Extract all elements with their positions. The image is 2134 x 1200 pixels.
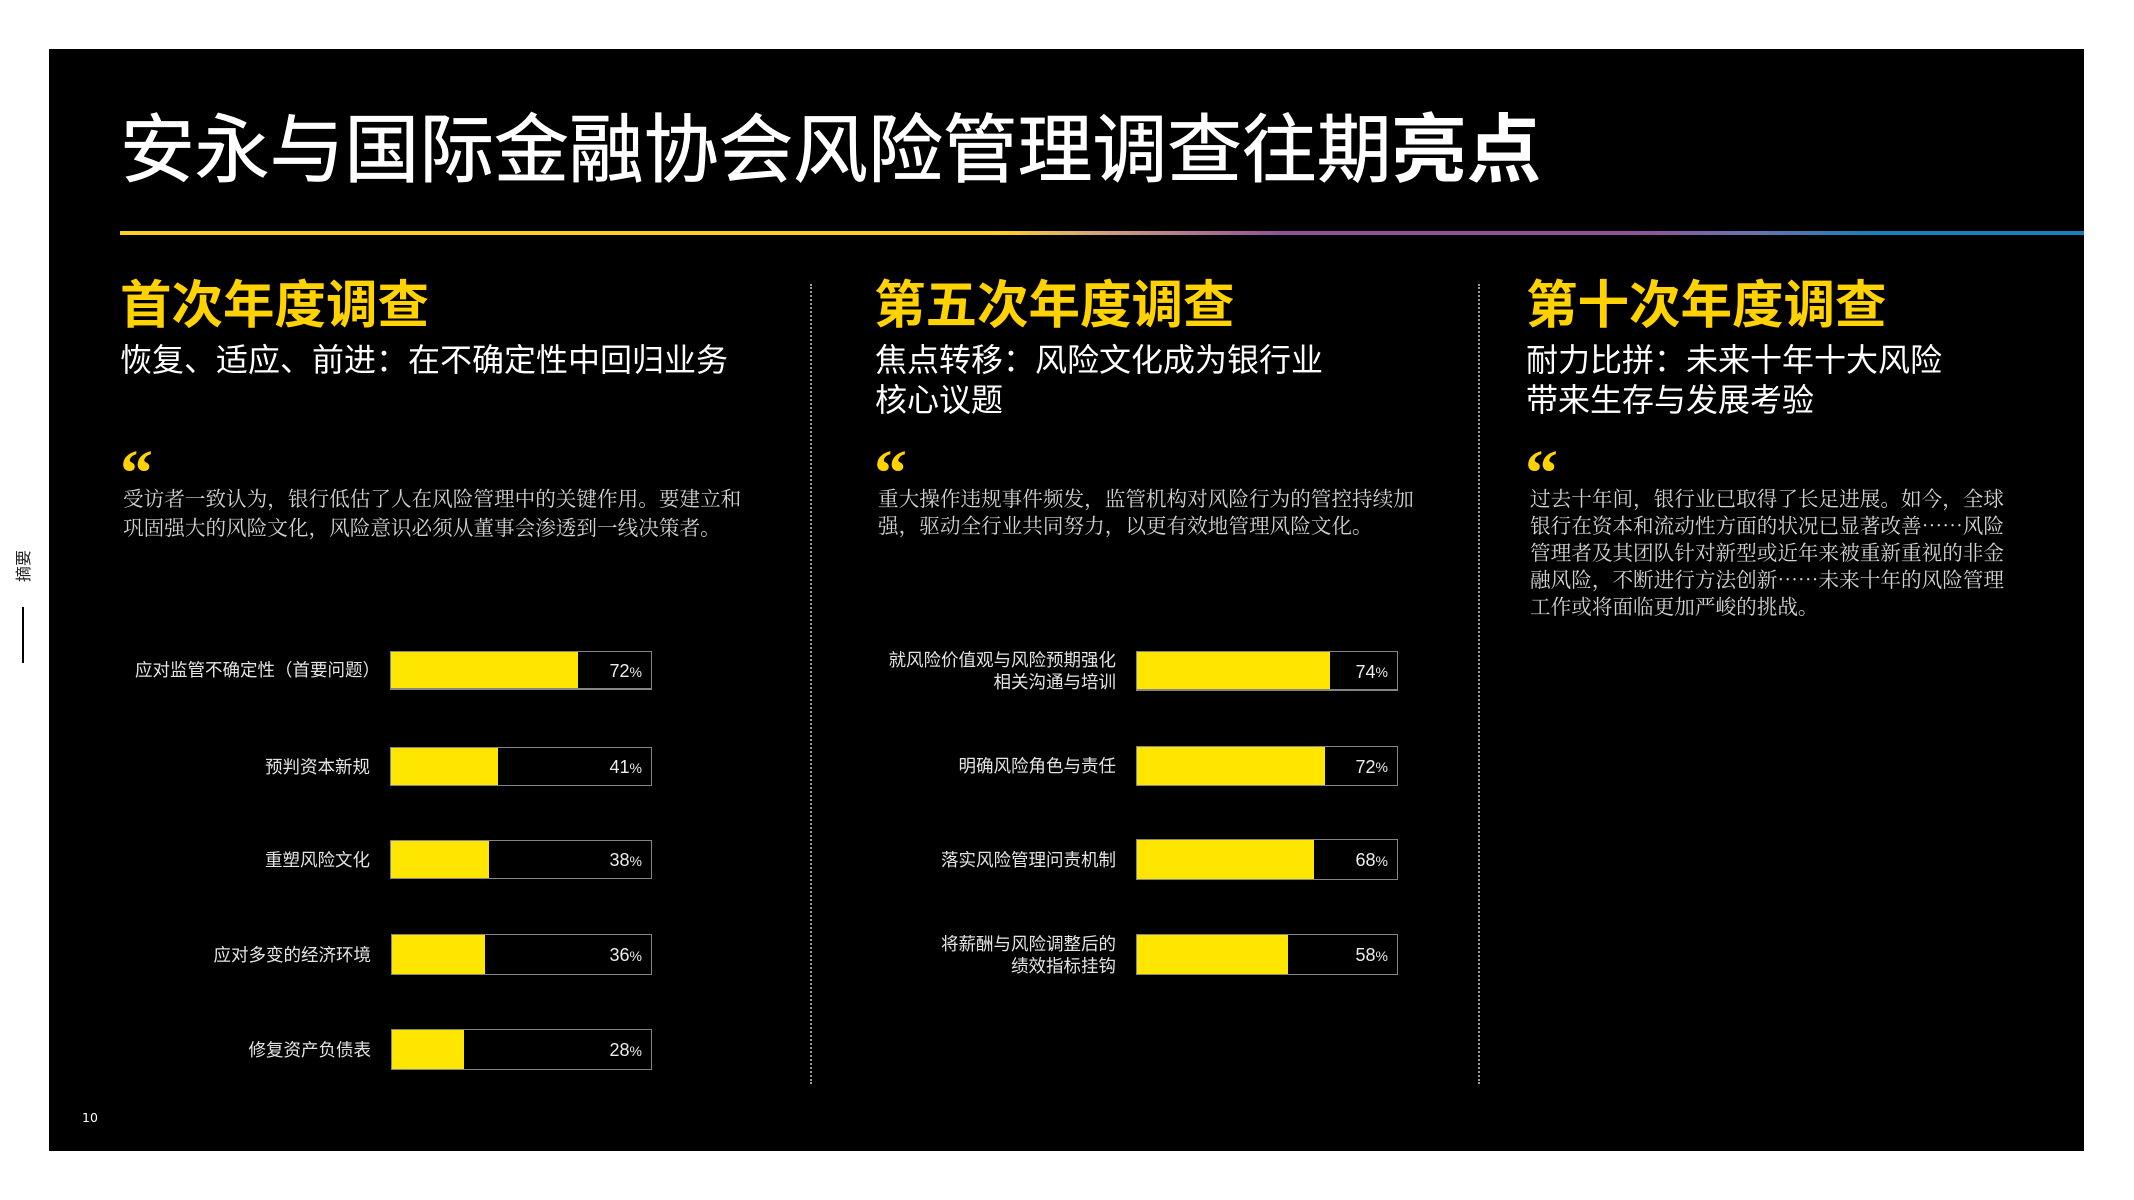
bar: 58%: 58	[1356, 945, 1376, 965]
bar: 58%: %	[1376, 948, 1388, 964]
quote text: fifth survey: 重大操作违规事件频发，监管机构对风险行为的管控持续加	[878, 482, 1414, 512]
quote text: tenth survey: 工作或将面临更加严峻的挑战。	[1530, 590, 1819, 620]
heading: first survey: 首次年度调查	[120, 263, 429, 338]
title: 安永与国际金融协会风险管理调查往期亮点	[120, 89, 1541, 198]
subheading: tenth survey	[1526, 335, 1942, 421]
subheading: first survey: 恢复、适应、前进：在不确定性中回归业务	[120, 335, 728, 381]
heading: fifth survey: 第五次年度调查	[874, 263, 1235, 338]
bar: 72%: %	[630, 664, 642, 680]
quote text: fifth survey: 强，驱动全行业共同努力，以更有效地管理风险文化。	[878, 509, 1373, 539]
bar: 72%: %	[1376, 759, 1388, 775]
bar: 38%: 38	[610, 850, 630, 870]
bar: 72%	[135, 651, 652, 690]
bar chart: first survey	[135, 651, 652, 1070]
panel: tenth annual survey	[1525, 263, 2004, 620]
bar: 74%: 74	[1356, 662, 1376, 682]
bar: 36%: %	[630, 948, 642, 964]
subheading: tenth survey: 带来生存与发展考验	[1526, 375, 1814, 421]
quote text: tenth survey: 过去十年间，银行业已取得了长足进展。如今，全球	[1530, 482, 2004, 512]
quote text: fifth survey	[878, 482, 1414, 539]
subheading: fifth survey: 核心议题	[875, 375, 1003, 421]
bar: 74%: 就风险价值观与风险预期强化	[888, 647, 1116, 672]
bar: 28%: 28	[610, 1040, 630, 1060]
bar: 74%: %	[1376, 664, 1388, 680]
quote text: first survey	[123, 482, 741, 541]
panel: first annual survey	[120, 263, 741, 1070]
icon: quote mark: “	[1525, 437, 1558, 510]
bar: 58%	[941, 930, 1398, 978]
bar: 38%	[265, 840, 652, 879]
quote text: first survey: 巩固强大的风险文化，风险意识必须从董事会渗透到一线决策者。	[123, 511, 721, 541]
bar: 38%: %	[630, 852, 642, 868]
bar: 68%: 落实风险管理问责机制	[941, 846, 1116, 872]
subheading: fifth survey: 焦点转移：风险文化成为银行业	[875, 335, 1323, 381]
quote text: tenth survey: 融风险，不断进行方法创新……未来十年的风险管理	[1530, 563, 2004, 593]
bar: 72%: 72	[1356, 756, 1376, 776]
panel: fifth annual survey	[874, 263, 1414, 978]
bar chart: fifth survey	[888, 647, 1398, 978]
bar: 72%: 应对监管不确定性（首要问题）	[135, 656, 380, 682]
bar: 28%	[248, 1029, 652, 1070]
bar: 36%	[214, 934, 652, 975]
bar: 28%: %	[630, 1042, 642, 1058]
bar: 72%: 72	[610, 661, 630, 681]
bar: 41%: %	[630, 760, 642, 776]
quote text: tenth survey: 银行在资本和流动性方面的状况已显著改善……风险	[1530, 509, 2004, 539]
bar: 41%: 41	[610, 757, 630, 777]
bar: 68%: 68	[1356, 850, 1376, 870]
bar: 68%	[941, 839, 1398, 880]
icon: quote mark: “	[120, 437, 153, 510]
side section label: 摘要	[10, 550, 34, 582]
bar: 41%: 预判资本新规	[265, 754, 370, 778]
page number: 10	[82, 1110, 98, 1125]
quote text: first survey: 受访者一致认为，银行低估了人在风险管理中的关键作用。要建立和	[123, 482, 741, 512]
bar: 58%: 将薪酬与风险调整后的	[941, 930, 1116, 956]
bar: 36%: 36	[610, 945, 630, 965]
icon: quote mark: “	[874, 437, 907, 510]
bar: 38%: 重塑风险文化	[265, 846, 370, 872]
quote text: tenth survey	[1530, 482, 2004, 620]
bar: 74%	[888, 647, 1398, 694]
subheading: fifth survey	[875, 335, 1323, 421]
bar: 41%	[265, 747, 652, 786]
bar: 28%: 修复资产负债表	[248, 1036, 371, 1062]
bar: 72%	[958, 746, 1398, 786]
quote text: tenth survey: 管理者及其团队针对新型或近年来被重新重视的非金	[1530, 536, 2004, 566]
bar: 58%: 绩效指标挂钩	[1011, 952, 1116, 978]
bar: 36%: 应对多变的经济环境	[214, 942, 371, 966]
subheading: tenth survey: 耐力比拼：未来十年十大风险	[1526, 335, 1942, 381]
bar: 72%: 明确风险角色与责任	[958, 753, 1116, 778]
heading: tenth survey: 第十次年度调查	[1526, 263, 1887, 338]
bar: 68%: %	[1376, 852, 1388, 868]
bar: 74%: 相关沟通与培训	[994, 669, 1116, 694]
